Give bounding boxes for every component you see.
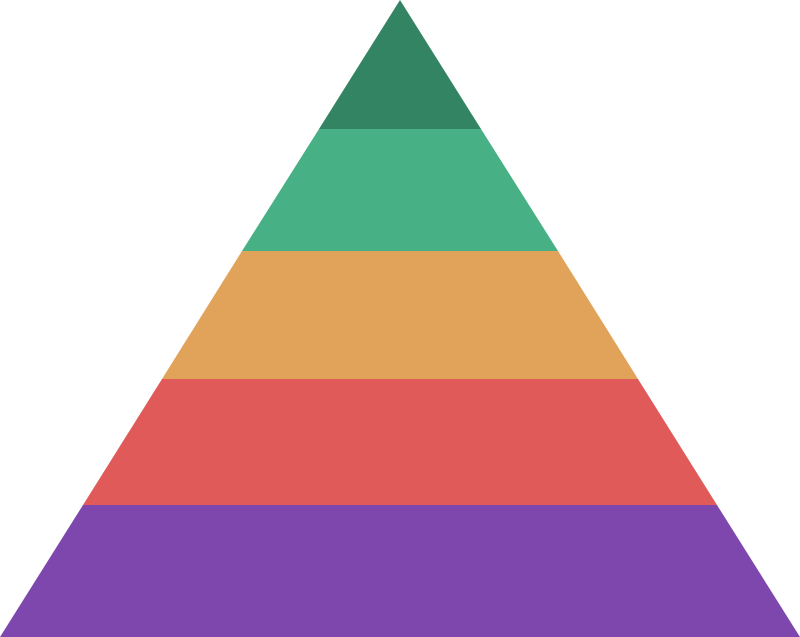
layer 3: orange [162,251,638,379]
layer 5: bottom purple [0,505,800,637]
layer 2: green [242,129,558,251]
layer 4: red [83,379,717,505]
layer 1: top dark green [319,0,481,129]
